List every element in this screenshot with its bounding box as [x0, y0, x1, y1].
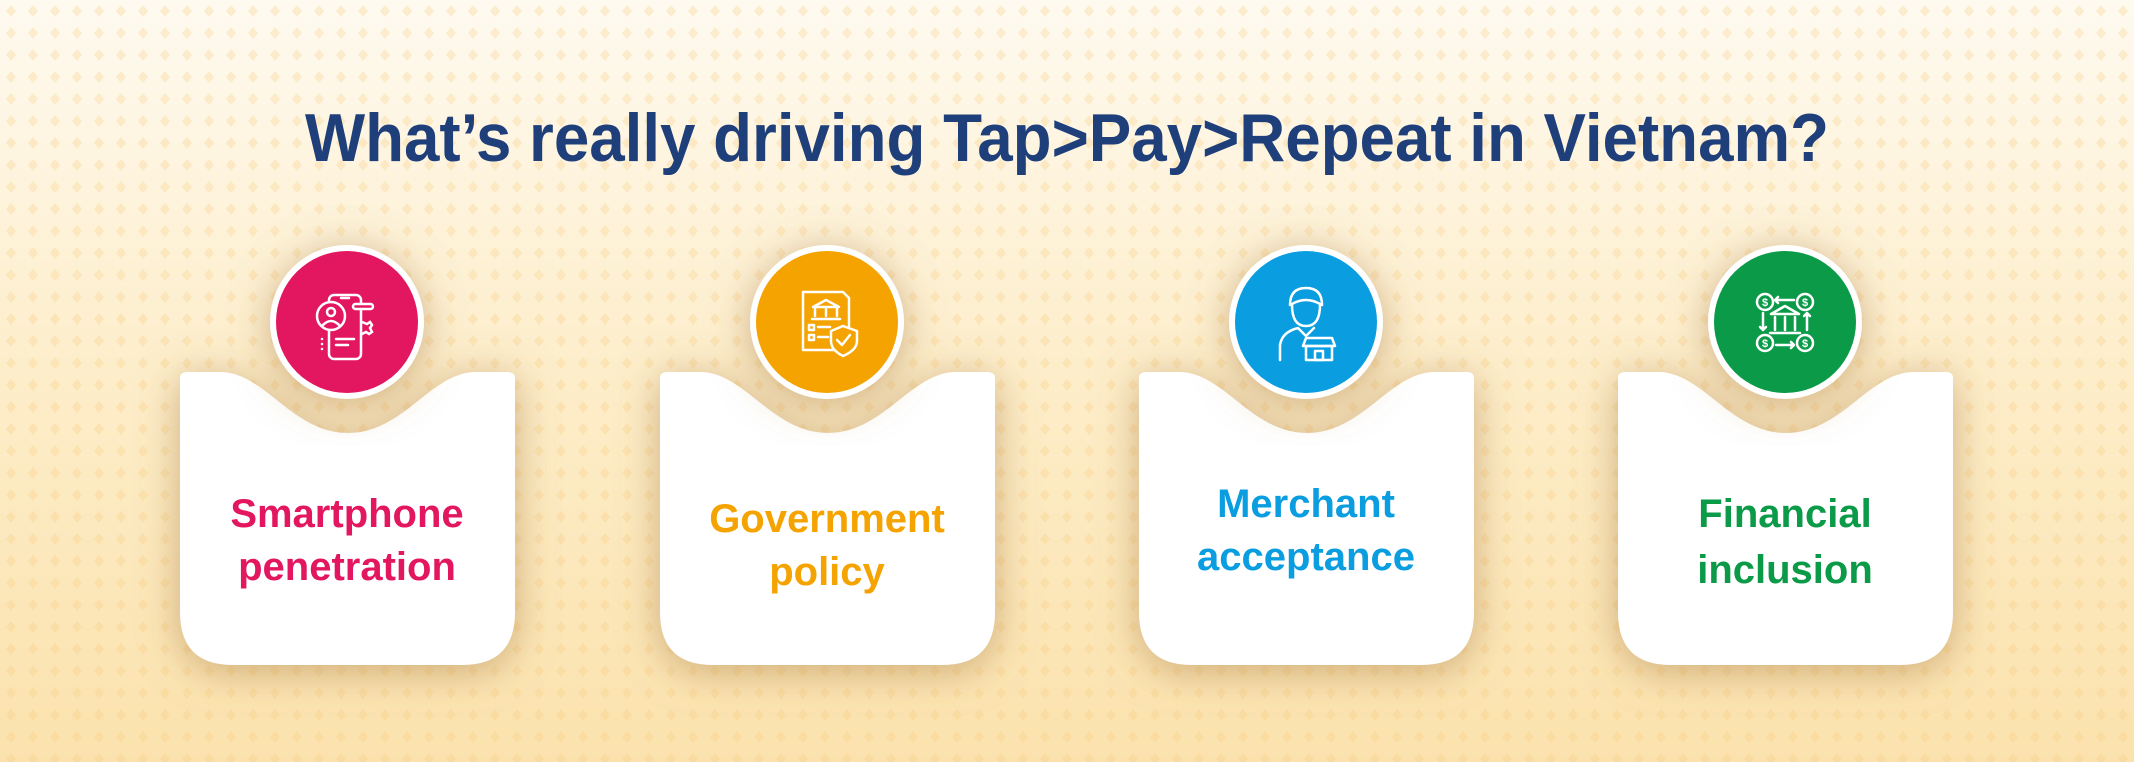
icon: smartphone — [270, 245, 424, 399]
label: financial inclusion: Financial — [1698, 492, 1872, 536]
label: government policy: policy — [769, 550, 886, 594]
label: government policy: Government — [709, 497, 945, 541]
panel: merchant acceptance — [1139, 245, 1474, 665]
title: What’s really driving Tap>Pay>Repeat in Vietnam? — [305, 100, 1829, 176]
panel: financial inclusion — [1618, 245, 1953, 665]
icon: government document — [750, 245, 904, 399]
panel: government policy — [660, 245, 995, 665]
label: financial inclusion: inclusion — [1697, 548, 1873, 592]
icon: merchant — [1229, 245, 1383, 399]
label: smartphone penetration: Smartphone — [230, 492, 464, 536]
label: smartphone penetration: penetration — [238, 545, 456, 589]
icon: bank with coins: $ — [1762, 338, 1768, 350]
icon: bank with coins: $ — [1802, 338, 1808, 350]
label: merchant acceptance: acceptance — [1197, 535, 1415, 579]
icon: bank with coins — [1708, 245, 1862, 399]
icon: bank with coins: $ — [1762, 297, 1768, 309]
icon: bank with coins: $ — [1802, 297, 1808, 309]
panel: smartphone penetration — [180, 245, 515, 665]
label: merchant acceptance: Merchant — [1217, 482, 1395, 526]
